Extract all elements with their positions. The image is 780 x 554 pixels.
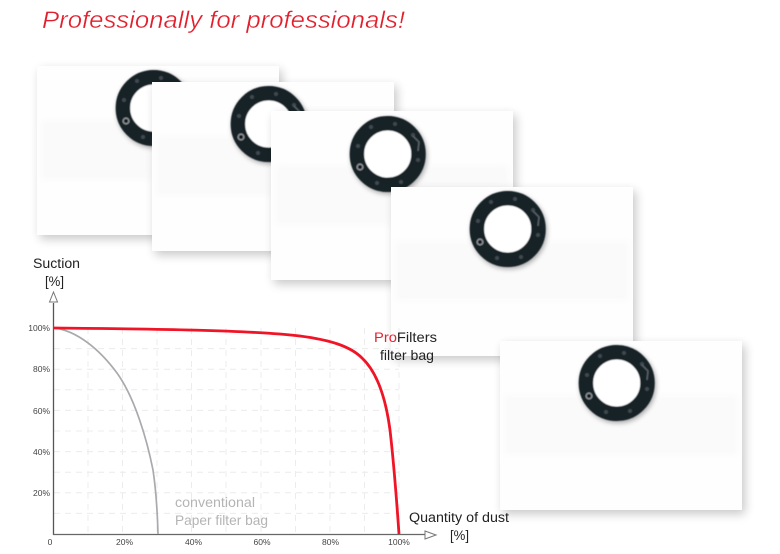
y axis title: [%] xyxy=(45,274,64,289)
x axis tick labels xyxy=(48,537,410,547)
y axis tick labels xyxy=(28,323,50,498)
y axis tick labels: 40% xyxy=(33,447,50,457)
curve: ProFilters filter bag xyxy=(53,328,399,534)
label: ProFilters filter bag: filter bag xyxy=(380,347,434,363)
y axis tick labels: 100% xyxy=(28,323,50,333)
y axis title: Suction xyxy=(33,256,80,271)
filter bag 1 xyxy=(37,66,279,235)
y axis with arrow xyxy=(50,292,58,535)
label: conventional paper filter bag xyxy=(175,494,268,528)
x axis title: Quantity of dust xyxy=(409,510,509,525)
x axis tick labels: 40% xyxy=(185,537,202,547)
y axis tick labels: 80% xyxy=(33,364,50,374)
filter bag 2 xyxy=(152,82,394,251)
filter bag 5 xyxy=(500,341,742,510)
label: ProFilters filter bag xyxy=(374,329,437,363)
title: Professionally for professionals! xyxy=(42,7,405,34)
label: conventional paper filter bag: conventional xyxy=(175,494,255,510)
x axis tick labels: 0 xyxy=(48,537,53,547)
curve: conventional paper filter bag xyxy=(53,328,158,534)
x axis tick labels: 100% xyxy=(388,537,410,547)
y axis tick labels: 20% xyxy=(33,488,50,498)
y axis tick labels: 60% xyxy=(33,406,50,416)
x axis tick labels: 80% xyxy=(322,537,339,547)
x axis with arrow xyxy=(53,531,436,539)
line chart: suction vs quantity of dust xyxy=(28,292,436,547)
label: ProFilters filter bag: ProFilters xyxy=(374,329,437,345)
y axis title xyxy=(33,256,80,289)
x axis tick labels: 60% xyxy=(253,537,271,547)
x axis title xyxy=(409,510,509,543)
x axis tick labels: 20% xyxy=(116,537,133,547)
filter bag 3 xyxy=(271,111,513,280)
label: conventional paper filter bag: Paper filter bag xyxy=(175,512,268,528)
filter bag 4 xyxy=(391,187,633,356)
x axis title: [%] xyxy=(450,528,469,543)
